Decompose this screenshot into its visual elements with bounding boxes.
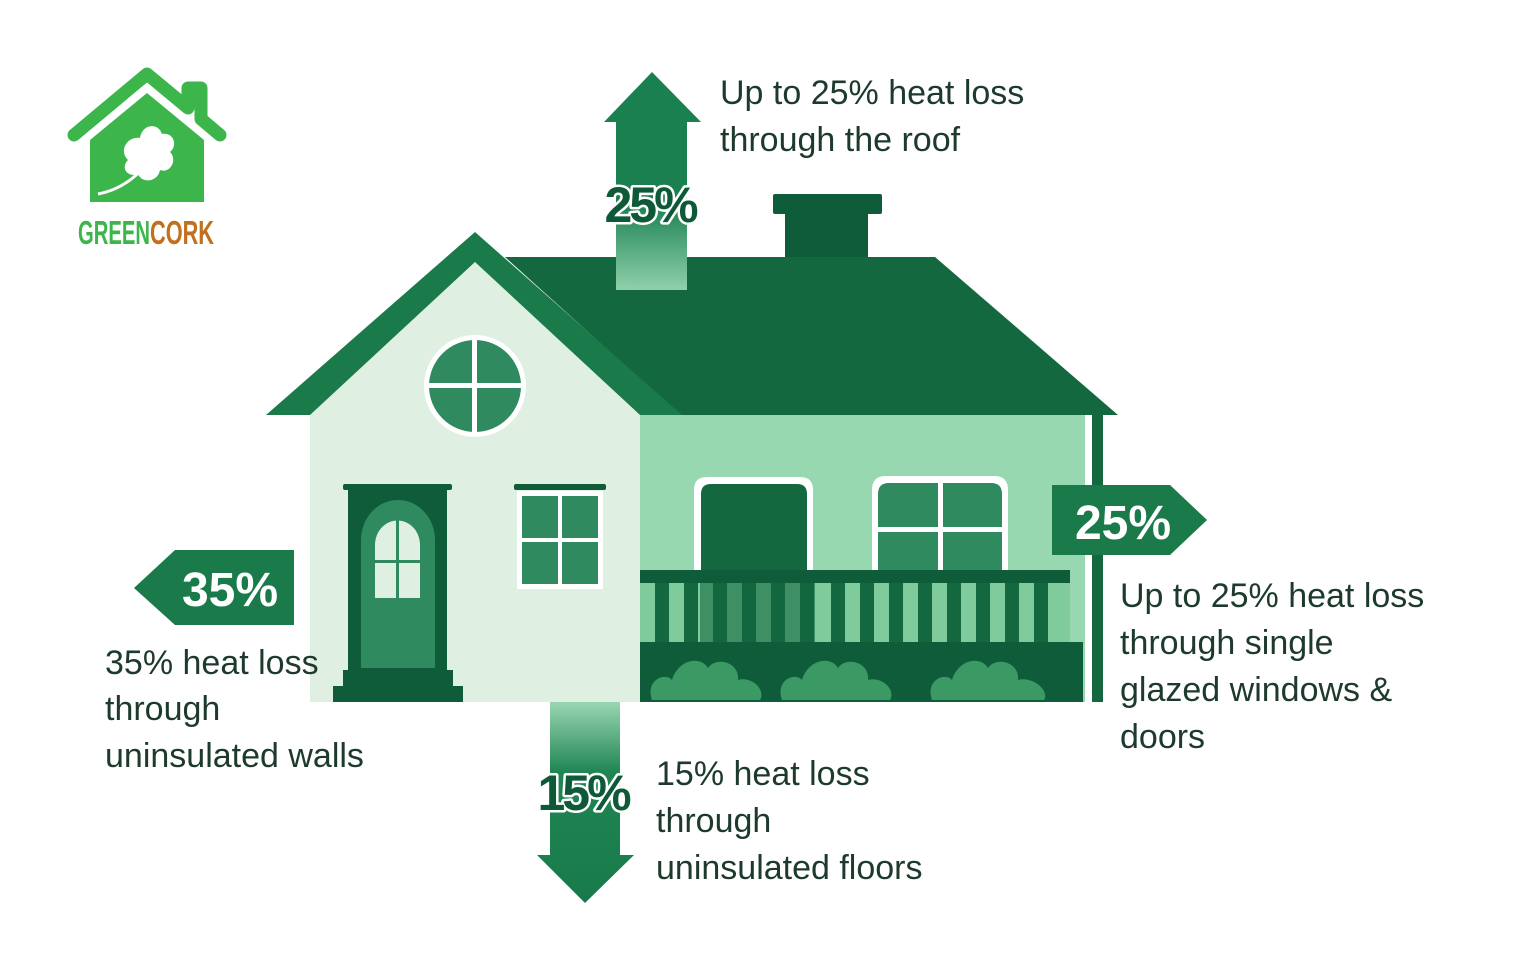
downpipe	[1092, 415, 1103, 702]
railing	[640, 570, 1070, 643]
left wall	[310, 262, 640, 702]
tag: 35% walls	[134, 550, 294, 625]
arrow: roof heat loss up	[604, 72, 701, 290]
arrow: floor heat loss down: 15%	[537, 765, 631, 821]
text: roof	[720, 74, 1024, 159]
text: roof: through the roof	[720, 121, 961, 159]
planter with bushes	[640, 642, 1083, 702]
right wall	[640, 415, 1085, 702]
text: floors: through	[656, 802, 771, 840]
round window	[424, 335, 526, 437]
main roof	[505, 257, 1118, 415]
house	[266, 194, 1118, 702]
tag: 25% windows	[1052, 485, 1207, 555]
text: floors: 15% heat loss	[656, 755, 870, 793]
text: windows: Up to 25% heat loss	[1120, 577, 1424, 615]
text: walls: through	[105, 690, 220, 728]
logo: greencork	[74, 74, 220, 251]
tag: 35% walls: 35%	[182, 564, 278, 617]
small window	[514, 484, 606, 589]
text: windows: through single	[1120, 624, 1334, 662]
text: walls: uninsulated walls	[105, 737, 364, 775]
porch window	[872, 476, 1008, 573]
porch door	[694, 477, 813, 572]
text: floors: uninsulated floors	[656, 849, 923, 887]
text: windows: glazed windows &	[1120, 671, 1392, 709]
arrow: floor heat loss down	[537, 702, 634, 903]
text: windows: doors	[1120, 718, 1205, 756]
chimney	[773, 194, 882, 260]
text: windows	[1120, 577, 1424, 756]
logo: greencork: GREEN	[78, 214, 150, 251]
text: walls: 35% heat loss	[105, 644, 319, 682]
door	[333, 484, 463, 702]
logo: greencork: CORK	[150, 214, 214, 251]
text: floors	[656, 755, 923, 887]
gable roof	[266, 232, 682, 415]
arrow: roof heat loss up: 25%	[604, 177, 698, 233]
tag: 25% windows: 25%	[1075, 497, 1171, 550]
text: walls	[105, 644, 364, 775]
text: roof: Up to 25% heat loss	[720, 74, 1024, 112]
